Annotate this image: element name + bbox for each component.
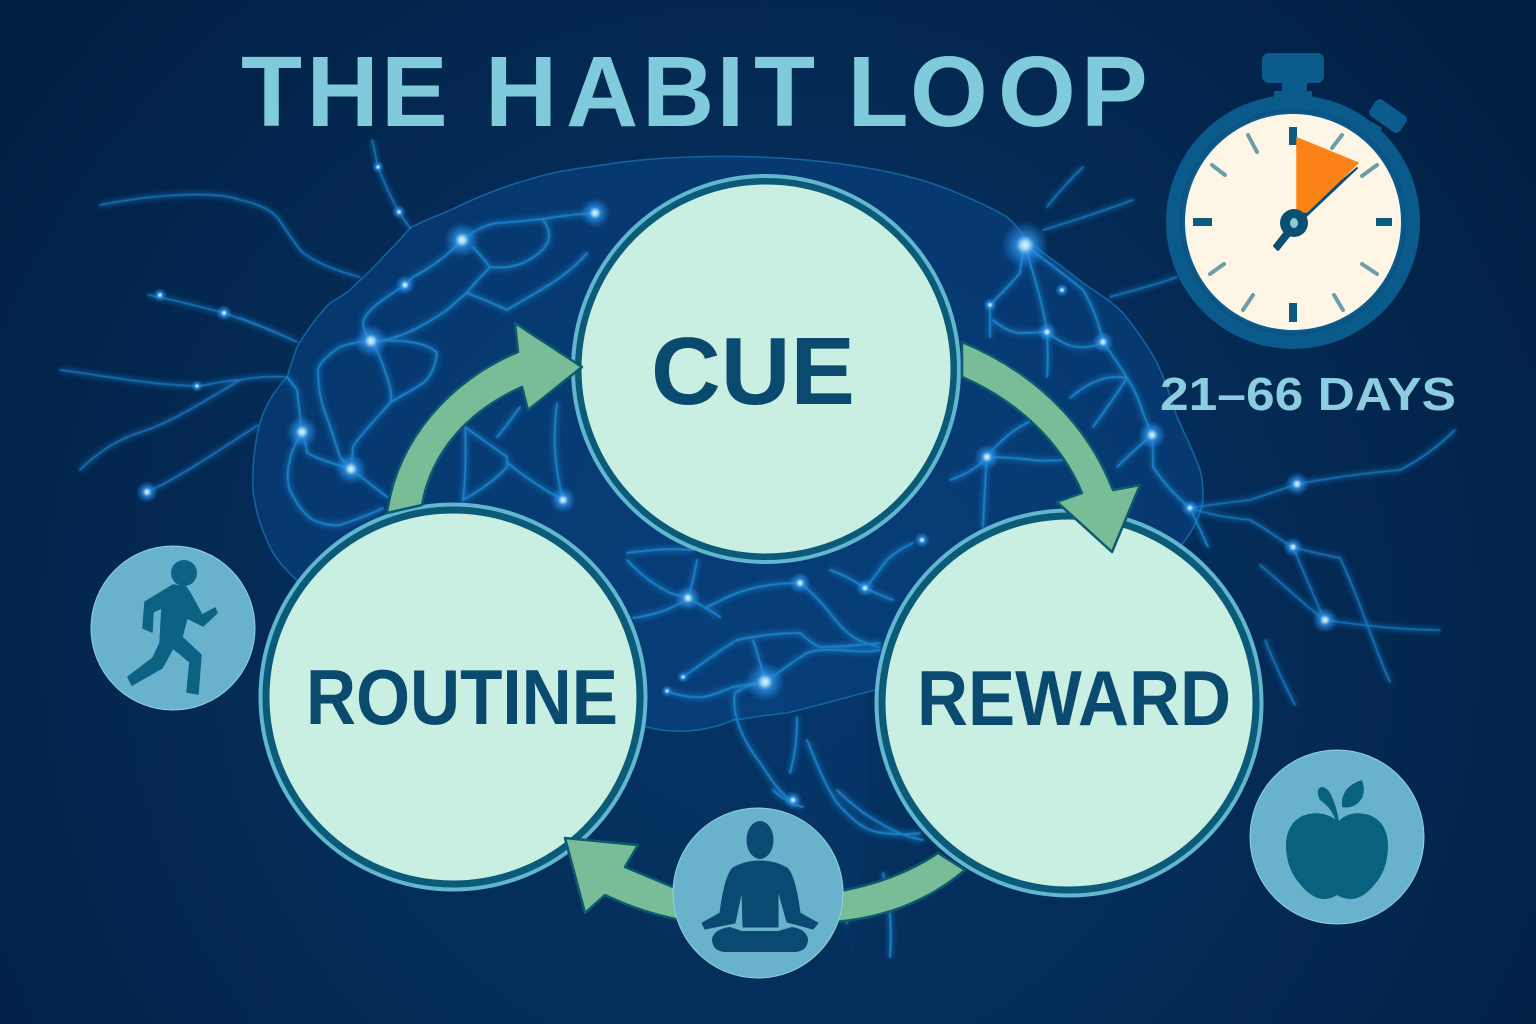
- clock hand: [1274, 168, 1357, 250]
- hour ticks: [1193, 127, 1392, 322]
- arrow: cue to reward: [962, 342, 1140, 552]
- label: cue: CUE: [651, 318, 855, 425]
- clock hub centre: [1290, 218, 1298, 228]
- icon: apple: [1250, 750, 1424, 924]
- neural pathways glow: [60, 140, 1455, 957]
- arrow: routine to cue: [387, 323, 582, 513]
- node: reward: [876, 510, 1262, 896]
- neuron glow points: [136, 161, 1338, 809]
- arrow: reward to routine: [565, 838, 965, 922]
- neural pathways: [60, 140, 1455, 957]
- minor ticks: [1210, 135, 1377, 310]
- icon: stopwatch: [1166, 53, 1420, 349]
- brain stem: [733, 692, 868, 960]
- brain with neural network: [60, 140, 1455, 960]
- icon: meditation: [673, 808, 843, 978]
- label: routine: ROUTINE: [306, 653, 618, 741]
- label: reward: REWARD: [917, 654, 1231, 742]
- node: routine: [260, 504, 646, 890]
- brain outline: [253, 156, 1203, 731]
- title: THE HABIT LOOP: [241, 36, 1148, 148]
- icon: runner: [91, 546, 255, 710]
- orange elapsed wedge: [1297, 138, 1358, 212]
- duration label: 21–66 DAYS: [1160, 368, 1456, 420]
- node: cue: [573, 176, 959, 562]
- clock hub: [1280, 209, 1308, 237]
